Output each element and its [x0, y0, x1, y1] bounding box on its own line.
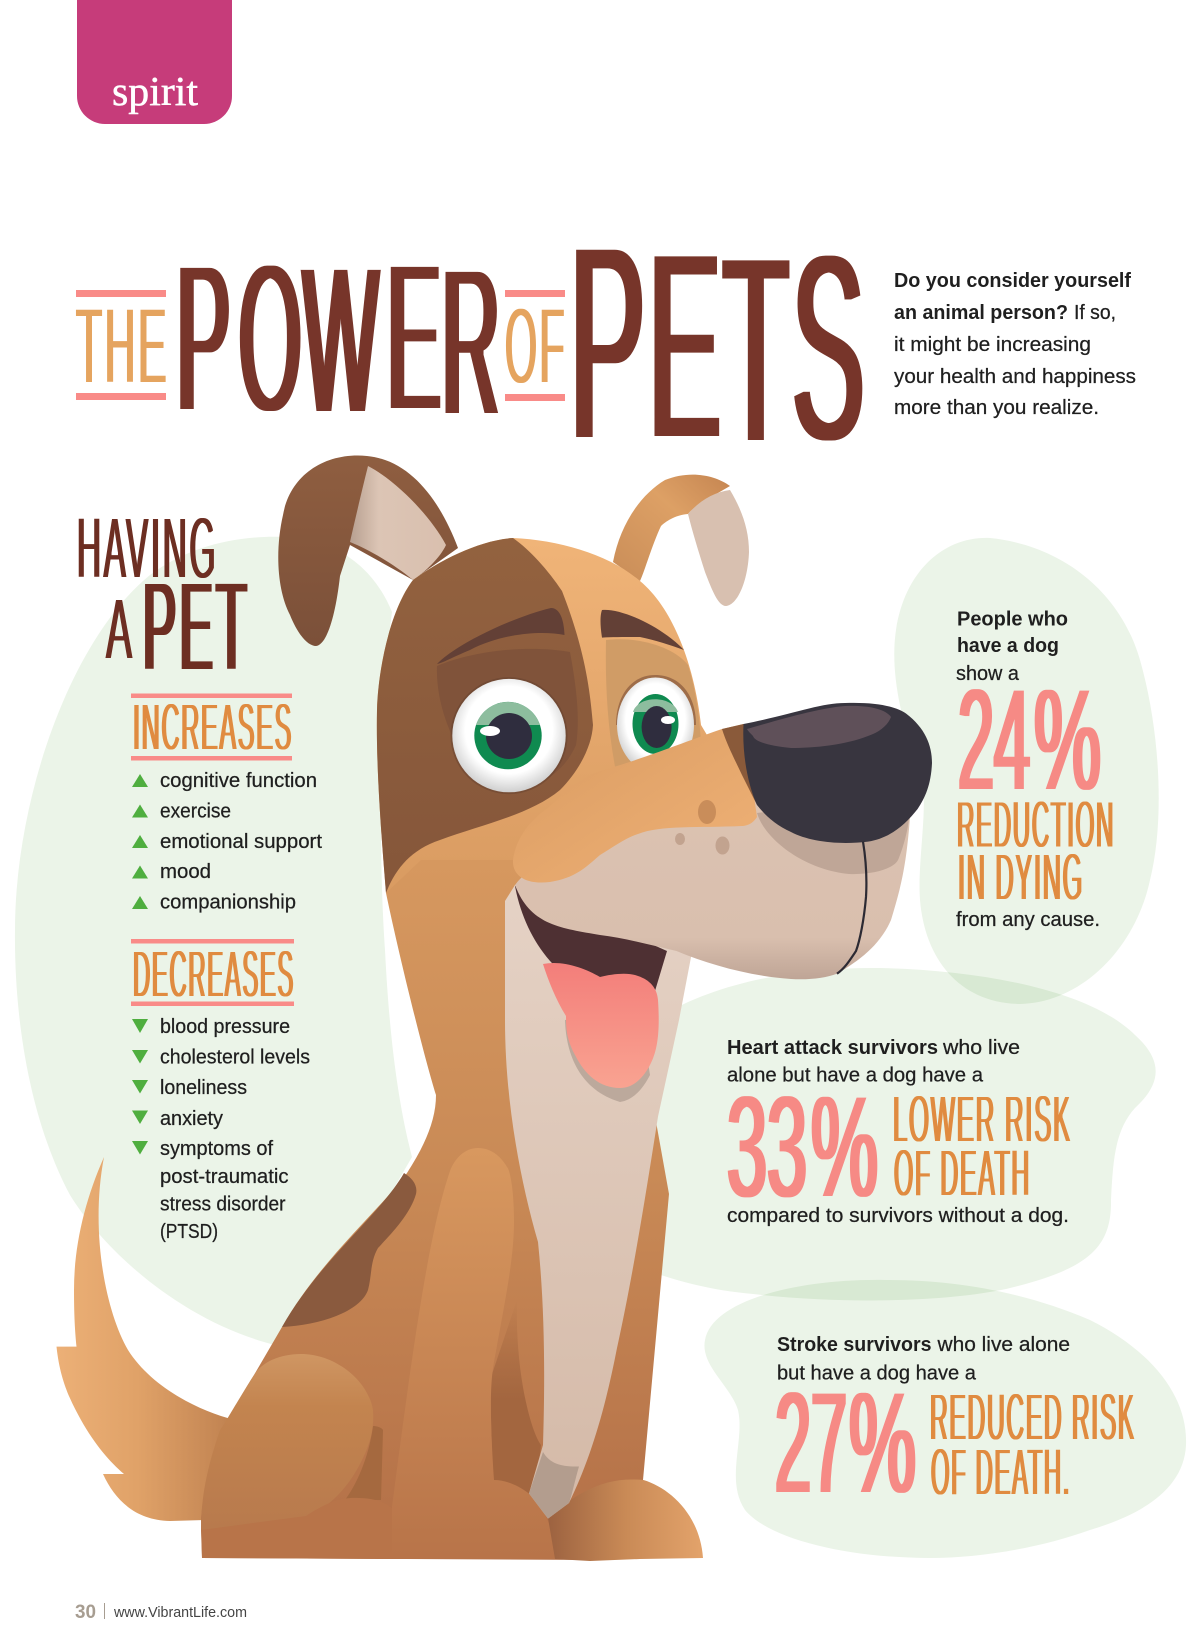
dog mouth	[515, 886, 667, 1000]
title accent bar	[505, 394, 565, 401]
stat: 27% reduced risk of death	[775, 1334, 1136, 1523]
text: HAVING	[77, 500, 218, 597]
right ear	[613, 475, 730, 581]
dog head	[377, 538, 722, 893]
illustration: cartoon dog	[56, 456, 932, 1561]
dog front leg	[392, 1148, 555, 1559]
title: the power of pets: THE	[76, 285, 169, 406]
body spot	[282, 1173, 416, 1327]
list: decreases items: stress disorder	[160, 1194, 286, 1216]
head brown patch	[377, 538, 593, 893]
text: PET	[143, 556, 250, 697]
title: the power of pets: OF	[505, 285, 567, 406]
list: decreases items	[132, 1016, 310, 1243]
stat: 24% reduction in dying: %	[1034, 661, 1101, 820]
heading: decreases	[131, 937, 295, 1012]
right eye socket	[606, 639, 701, 790]
stat: 24% reduction in dying: 24	[958, 661, 1030, 820]
text: DECREASES	[133, 937, 295, 1012]
list: increases items: exercise	[160, 800, 231, 822]
dog tongue	[543, 963, 659, 1088]
stat: 24% reduction in dying	[956, 608, 1115, 931]
right eye	[616, 675, 696, 772]
nose shadow on muzzle	[757, 800, 909, 874]
title word: pets: ETS	[649, 198, 864, 497]
whisker dots	[675, 833, 730, 854]
intro paragraph	[894, 270, 1136, 419]
stat: 33% lower risk of death: compared to survivors without a dog.	[727, 1205, 1069, 1227]
stat: 24% reduction in dying: People who	[957, 608, 1068, 630]
left eye	[450, 677, 568, 794]
background blob: having a pet	[15, 537, 412, 1350]
list: decreases items: cholesterol levels	[160, 1046, 310, 1068]
text: INCREASES	[133, 690, 293, 765]
list: increases items: cognitive function	[160, 770, 317, 792]
section tab: spirit: spirit	[112, 68, 199, 114]
list: decreases items: post-traumatic	[160, 1166, 288, 1188]
list: increases items: companionship	[160, 892, 296, 914]
intro paragraph: your health and happiness	[894, 366, 1136, 388]
list: increases items	[132, 770, 322, 914]
footer: page number and website: www.VibrantLife.com	[113, 1604, 247, 1621]
dog nose	[743, 703, 932, 843]
nose highlight	[747, 706, 891, 748]
lower chest shadow	[529, 1452, 579, 1519]
list: decreases items: blood pressure	[160, 1016, 290, 1038]
stat: 24% reduction in dying: show a	[956, 663, 1020, 685]
list: decreases items: loneliness	[160, 1077, 247, 1099]
right front paw	[548, 1479, 703, 1561]
title: the power of pets	[76, 189, 864, 497]
stat: 33% lower risk of death	[727, 1037, 1072, 1227]
stat: 27% reduced risk of death: %	[849, 1364, 916, 1523]
list: decreases items: symptoms of	[160, 1138, 273, 1160]
intro paragraph: more than you realize.	[894, 397, 1099, 419]
up arrows	[132, 774, 148, 909]
stat: 33% lower risk of death: alone but have a dog have a	[727, 1064, 984, 1086]
background blob: stroke stat	[704, 1280, 1186, 1558]
dog muzzle	[515, 770, 910, 979]
title word: power: POWER	[177, 220, 500, 460]
footer: page number and website	[75, 1602, 247, 1623]
background blob: heart attack stat	[640, 968, 1156, 1300]
dog chest	[505, 885, 692, 1519]
dog tail	[56, 1157, 235, 1521]
mouth line	[837, 842, 866, 974]
stat: 33% lower risk of death: Heart attack survivors	[727, 1037, 938, 1059]
stat: 27% reduced risk of death: 27	[775, 1364, 847, 1523]
intro paragraph: an animal person?	[894, 302, 1068, 324]
stat: 24% reduction in dying: from any cause.	[956, 909, 1100, 931]
heading: having a pet: A	[106, 581, 132, 678]
footer: page number and website: 30	[75, 1602, 96, 1623]
left inner ear	[350, 466, 446, 580]
stat: 27% reduced risk of death: Stroke survivors	[777, 1334, 932, 1356]
stat: 27% reduced risk of death: who live alone	[936, 1334, 1070, 1356]
stat: 24% reduction in dying: have a dog	[957, 635, 1059, 657]
right eyebrow	[600, 610, 684, 650]
stat: 33% lower risk of death: %	[811, 1068, 878, 1227]
stat: 33% lower risk of death: who live	[942, 1037, 1020, 1059]
section tab: spirit	[77, 0, 232, 124]
dog thigh	[201, 1354, 373, 1530]
heading: having a pet	[77, 500, 250, 697]
intro paragraph: Do you consider yourself	[894, 270, 1131, 292]
left eyebrow	[437, 608, 564, 664]
intro paragraph: it might be increasing	[894, 334, 1091, 356]
left eye socket	[437, 649, 578, 792]
brown patch by nose	[722, 724, 757, 805]
title accent bar	[505, 290, 565, 297]
stat: 33% lower risk of death: 33	[727, 1068, 807, 1227]
left ear	[278, 456, 458, 646]
dog body and neck	[201, 790, 669, 1560]
dog snout	[513, 724, 757, 883]
title accent bar	[76, 290, 166, 297]
list: decreases items: (PTSD)	[160, 1221, 218, 1243]
title word: pets: P	[570, 189, 645, 497]
shade behind thigh	[345, 1426, 383, 1500]
back paw	[201, 1498, 392, 1559]
background blob: dog owners stat	[894, 538, 1159, 1004]
shade behind front leg	[490, 1300, 541, 1500]
heading: increases	[131, 690, 293, 765]
snout nostril mark	[698, 800, 716, 824]
intro paragraph: If so,	[1074, 302, 1116, 324]
stat: 27% reduced risk of death: but have a dog have a	[777, 1362, 977, 1384]
down arrows	[132, 1019, 148, 1154]
list: increases items: emotional support	[160, 831, 322, 853]
right inner ear	[688, 490, 749, 606]
list: increases items: mood	[160, 861, 211, 883]
tongue shadow	[565, 1010, 650, 1102]
list: decreases items: anxiety	[160, 1108, 223, 1130]
title accent bar	[76, 393, 166, 400]
